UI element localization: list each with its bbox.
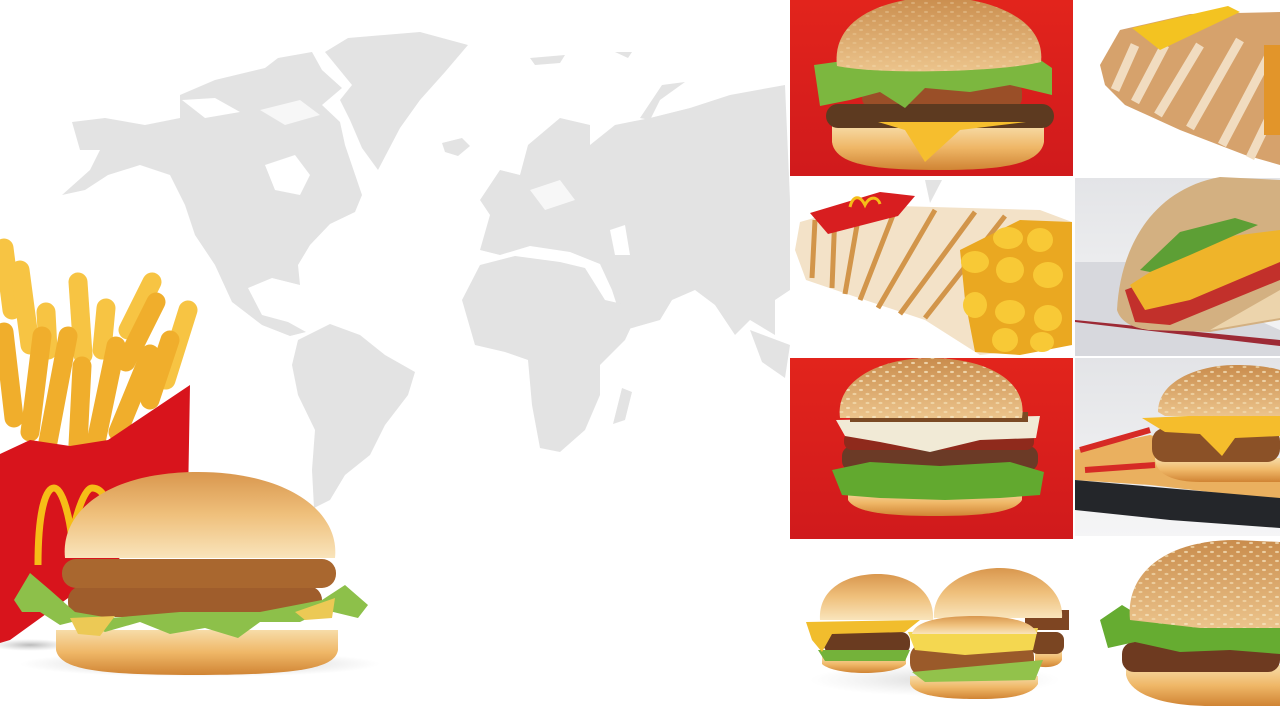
map: Southeast Asia	[750, 330, 790, 378]
small burger front	[908, 616, 1043, 699]
map: North America	[62, 52, 362, 336]
map: Japan edge	[925, 180, 942, 203]
top bun	[65, 472, 335, 558]
photo grid	[790, 0, 1280, 706]
patties	[68, 586, 322, 617]
panel: red burger top left	[790, 0, 1073, 176]
large double patty burger	[0, 472, 380, 677]
fries and red carton	[0, 248, 190, 643]
panel: wrap top right	[1100, 6, 1280, 165]
map: Europe and Asia	[480, 85, 790, 335]
map: white lakes and seas	[182, 98, 630, 255]
golden arches logo	[38, 488, 106, 565]
map: Madagascar	[613, 388, 632, 424]
lettuce	[14, 573, 368, 638]
fries	[4, 248, 188, 445]
bottom bun	[56, 630, 338, 675]
sauce	[70, 598, 335, 636]
small burger left	[806, 574, 933, 673]
small burger back right	[934, 568, 1069, 667]
panel: grey burger on tray	[1075, 358, 1280, 536]
red carton	[0, 385, 190, 643]
panel: trio of small burgers	[806, 568, 1069, 699]
panel: striped wrap with nuggets	[795, 192, 1072, 355]
world map	[62, 32, 790, 508]
map: Greenland	[325, 32, 468, 170]
panel: red burger with egg	[790, 358, 1073, 539]
map: Iceland	[442, 138, 470, 156]
panel: grey wrap	[1075, 177, 1280, 356]
map: Arctic islands	[530, 52, 685, 120]
panel: large sesame burger bottom right	[1100, 540, 1280, 706]
map: Africa	[462, 256, 640, 452]
map: South America	[292, 324, 415, 508]
burger shadow	[20, 651, 380, 677]
